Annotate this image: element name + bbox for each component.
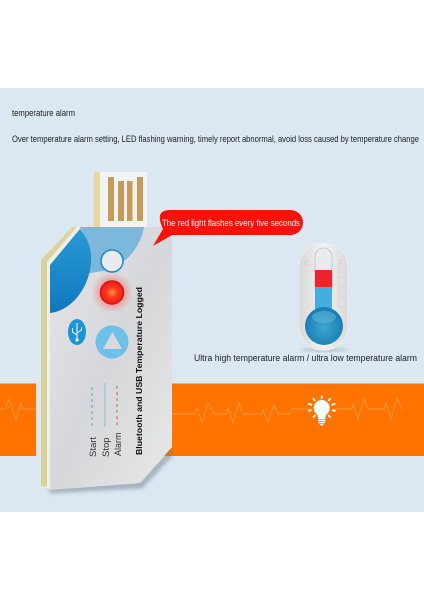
label: C: C: [304, 259, 310, 268]
device face: [50, 227, 172, 490]
callout: red light: [153, 210, 303, 246]
icon: USB: [68, 319, 86, 345]
label: Stop: Stop: [101, 437, 112, 457]
bulb: [305, 307, 343, 345]
heartbeat line right: [335, 398, 402, 419]
label: Start: Start: [88, 437, 99, 457]
button with triangle: [96, 326, 128, 358]
tube: [315, 248, 332, 290]
scale marks: [339, 267, 345, 307]
device shadow: [48, 448, 172, 493]
thermometer shadow: [300, 348, 348, 352]
icon: light bulb: [308, 396, 336, 426]
indicator ring: [101, 250, 123, 272]
background panel: [0, 88, 424, 512]
blue level: [315, 287, 332, 317]
red LED: [91, 272, 133, 314]
red level: [315, 270, 332, 287]
thermometer caption: Ultra high temperature alarm / ultra low temperature alarm: [194, 353, 417, 363]
thermometer shell: [299, 243, 348, 350]
heading text: temperature alarm: [12, 108, 75, 118]
status dashes: [92, 383, 117, 428]
heartbeat line left: [0, 399, 36, 419]
USB connector: [94, 172, 147, 228]
label: F: F: [338, 259, 343, 268]
yellow stripe: [41, 227, 77, 487]
callout: red light: The red light flashes every five seconds: [162, 218, 300, 228]
device: USB temperature logger: [41, 172, 172, 493]
heartbeat line centre: [172, 403, 310, 423]
device side edge: [41, 227, 81, 489]
blue corner graphic: [50, 227, 144, 313]
orange band: [0, 384, 424, 456]
thermometer: [299, 243, 348, 352]
device title: Bluetooth and USB Temperature Logged: [135, 287, 144, 455]
label: Alarm: Alarm: [113, 432, 123, 456]
